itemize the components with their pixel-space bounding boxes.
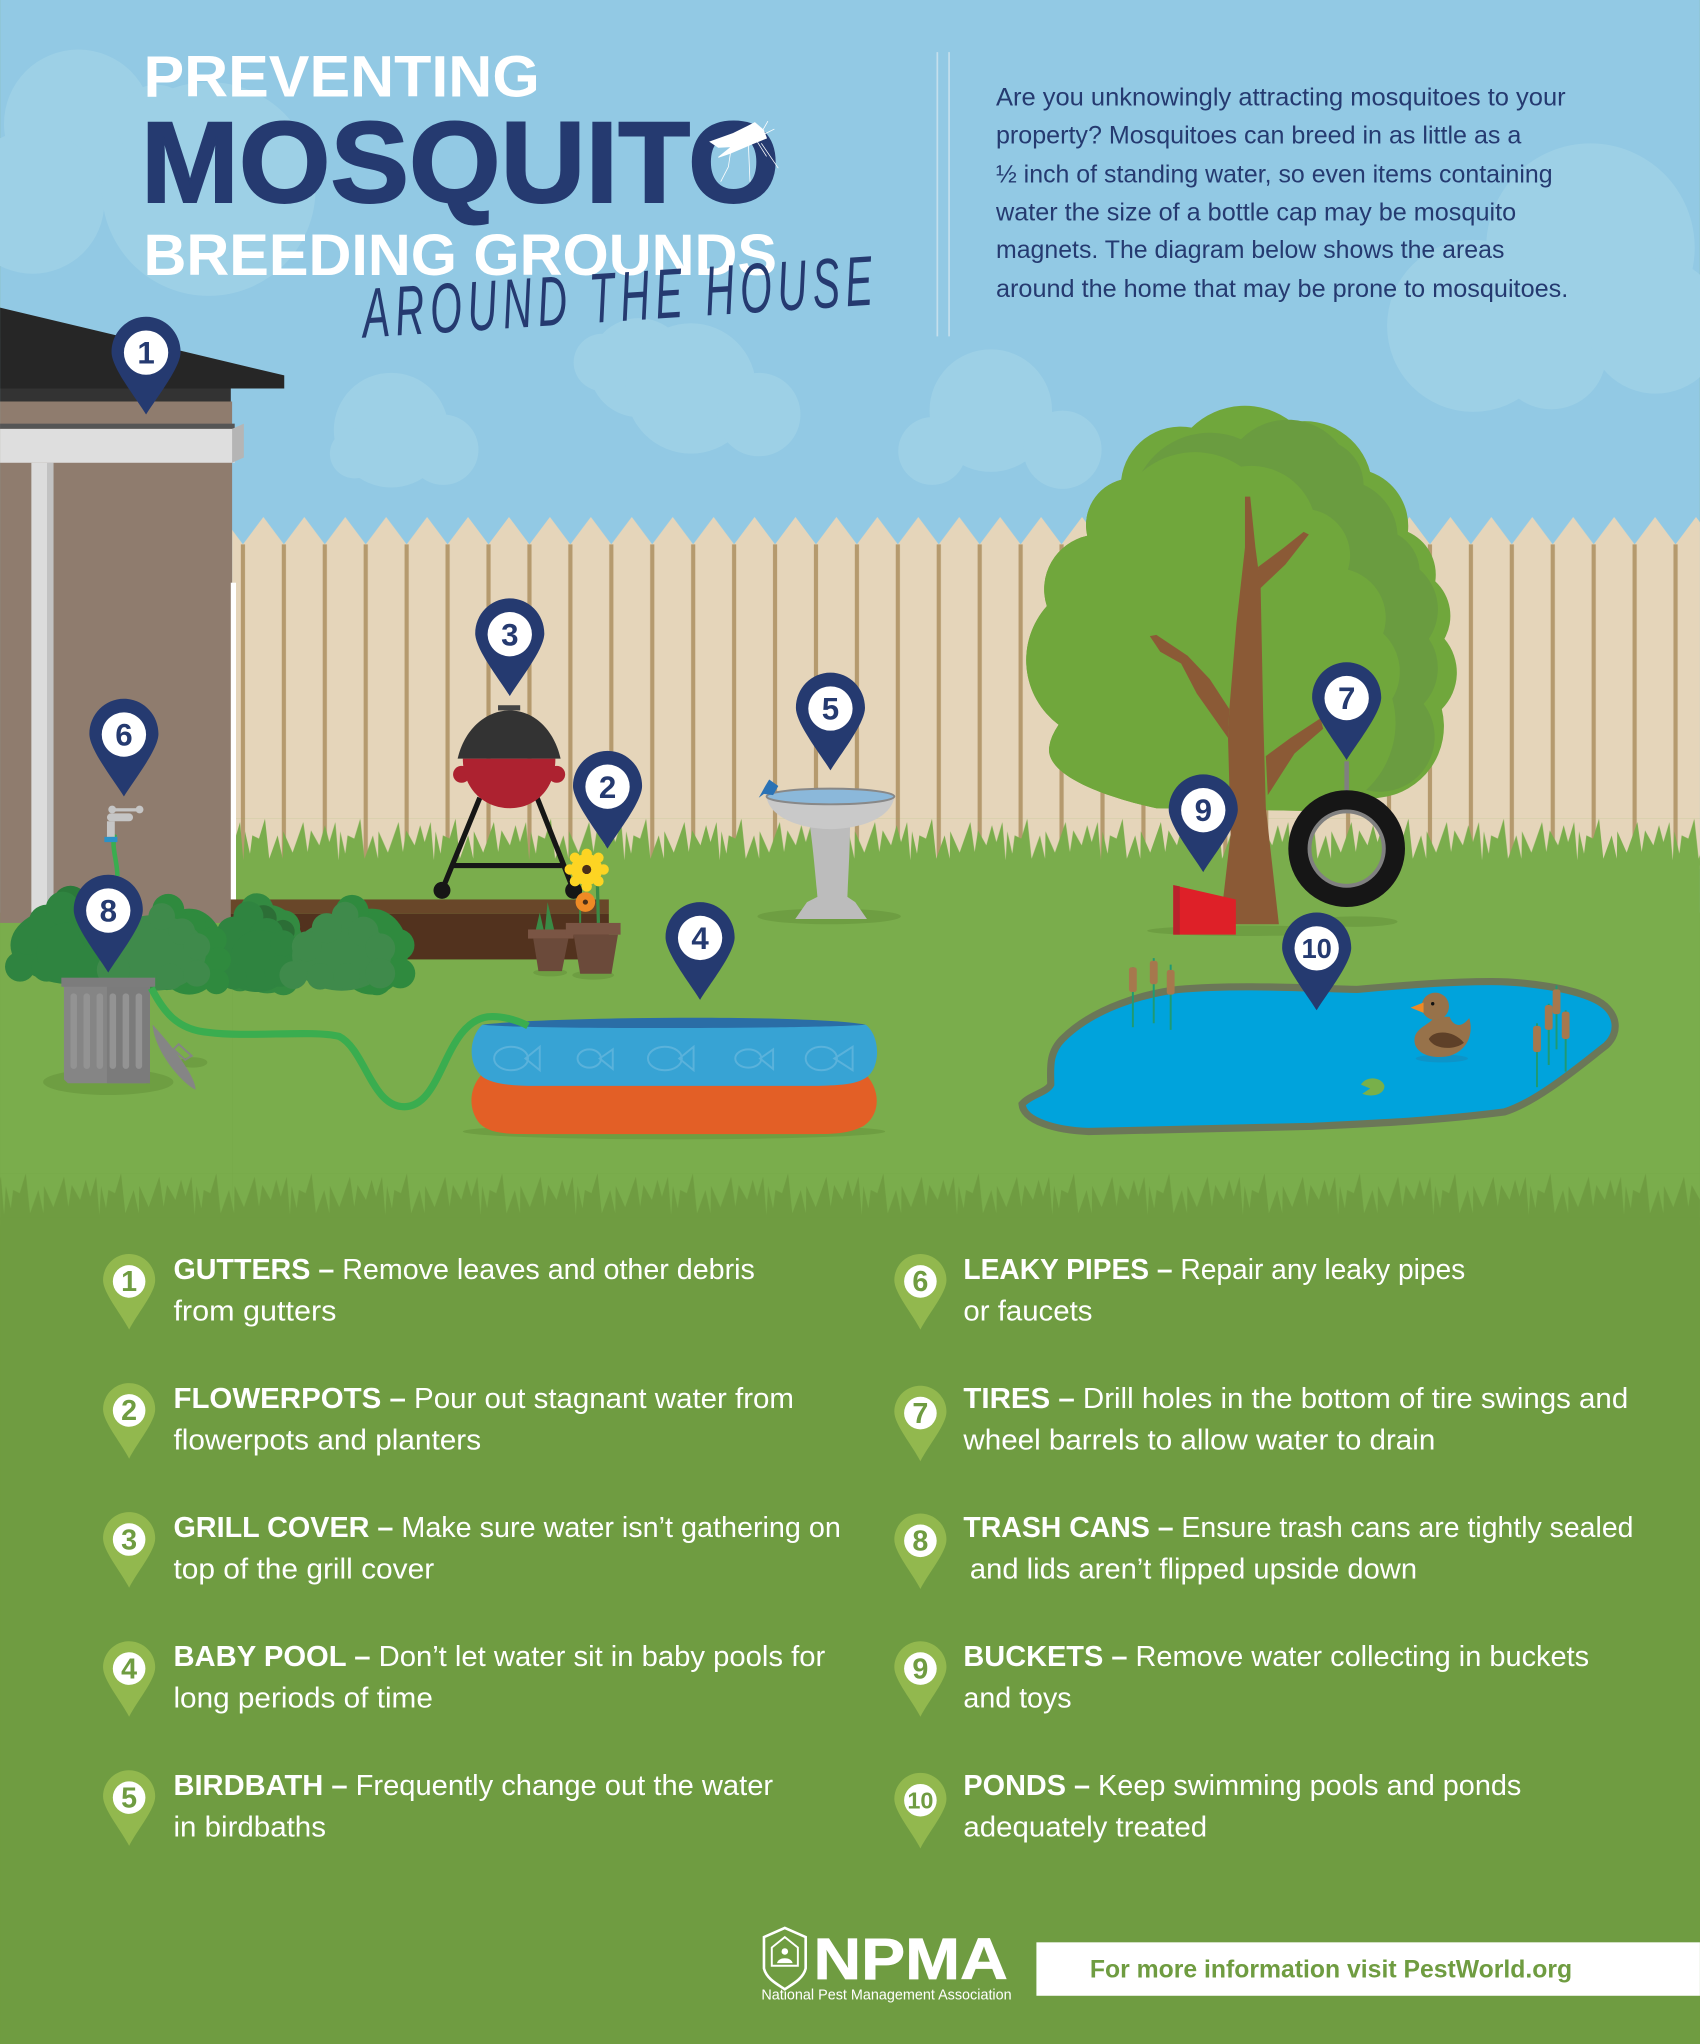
title xyxy=(141,44,875,354)
intro text block xyxy=(995,84,1568,303)
title: AROUND THE HOUSE xyxy=(358,242,875,354)
list item 8: trash cans xyxy=(894,1512,1633,1589)
list item 1: gutters: 1 xyxy=(121,1266,137,1298)
faucet xyxy=(104,806,143,876)
list item 4: baby pool xyxy=(103,1641,826,1717)
list item 3: grill cover xyxy=(103,1512,841,1588)
list item 6: leaky pipes: LEAKY PIPES – Repair any leaky pipes xyxy=(963,1254,1465,1286)
logo: NPMA: National Pest Management Association xyxy=(761,1987,1012,2004)
map pin 8: 8 xyxy=(100,894,117,929)
list item 1: gutters: GUTTERS – Remove leaves and other debris xyxy=(173,1254,755,1286)
map pin 10 xyxy=(1282,912,1351,1010)
call to action bar xyxy=(1036,1942,1700,1996)
trash can xyxy=(43,978,207,1095)
list item 9: buckets: 9 xyxy=(912,1653,928,1685)
raised bed xyxy=(231,899,609,959)
map pin 7 xyxy=(1312,662,1381,760)
birdbath xyxy=(757,780,901,924)
map pin 5 xyxy=(796,673,865,770)
list item 4: baby pool: long periods of time xyxy=(173,1683,433,1715)
flowerpots xyxy=(528,849,621,980)
list item 7: tires: 7 xyxy=(912,1398,928,1430)
tree canopy xyxy=(1026,406,1457,811)
list item 10: ponds: PONDS – Keep swimming pools and ponds xyxy=(963,1770,1521,1802)
map pin 3: 3 xyxy=(501,617,518,652)
list item 8: trash cans: TRASH CANS – Ensure trash cans are tightly sealed xyxy=(963,1512,1633,1544)
list item 4: baby pool: 4 xyxy=(121,1653,137,1685)
bush 4 xyxy=(279,895,415,995)
logo: NPMA xyxy=(761,1927,1012,2004)
list item 5: birdbath xyxy=(103,1770,774,1846)
list item 10: ponds: adequately treated xyxy=(963,1812,1207,1844)
house xyxy=(0,308,284,923)
list item 8: trash cans: 8 xyxy=(912,1526,928,1558)
divider xyxy=(937,52,949,336)
baby pool xyxy=(463,1018,885,1139)
title: PREVENTING xyxy=(143,44,540,109)
list item 6: leaky pipes: or faucets xyxy=(963,1296,1092,1328)
map pin 3 xyxy=(475,598,544,696)
intro text block: property? Mosquitoes can breed in as little as a xyxy=(996,121,1522,149)
list item 1: gutters xyxy=(103,1254,755,1330)
list item 2: flowerpots xyxy=(103,1383,794,1459)
list item 7: tires xyxy=(894,1383,1628,1461)
list item 5: birdbath: 5 xyxy=(121,1782,137,1814)
list item 2: flowerpots: FLOWERPOTS – Pour out stagnant water from xyxy=(173,1383,794,1415)
intro text block: around the home that may be prone to mosquitoes. xyxy=(996,275,1568,303)
list item 9: buckets xyxy=(894,1641,1589,1717)
bucket xyxy=(1147,885,1398,936)
list item 10: ponds: 10 xyxy=(907,1788,933,1814)
map pin 8 xyxy=(74,875,143,972)
list item 3: grill cover: GRILL COVER – Make sure water isn’t gathering on xyxy=(173,1512,841,1544)
list item 7: tires: wheel barrels to allow water to drain xyxy=(962,1425,1435,1457)
logo: NPMA: NPMA xyxy=(814,1927,1008,1992)
bushes xyxy=(5,886,415,995)
map pin 10: 10 xyxy=(1301,933,1332,964)
list item 9: buckets: BUCKETS – Remove water collecting in buckets xyxy=(963,1641,1589,1673)
bush 3 xyxy=(217,893,304,995)
title: MOSQUITO xyxy=(141,99,780,227)
grill xyxy=(434,705,582,899)
map pin 4 xyxy=(666,902,735,1000)
intro text block: magnets. The diagram below shows the areas xyxy=(996,236,1504,264)
list item 2: flowerpots: flowerpots and planters xyxy=(173,1425,481,1457)
icon: yellow flower xyxy=(565,849,609,892)
call to action bar: For more information visit PestWorld.org xyxy=(1090,1956,1572,1984)
map pin 2: 2 xyxy=(599,770,616,805)
cattails xyxy=(1129,958,1570,1087)
lower panel background xyxy=(0,1173,1700,2044)
title: BREEDING GROUNDS xyxy=(143,223,777,288)
list item 9: buckets: and toys xyxy=(963,1683,1072,1715)
tree trunk xyxy=(1150,497,1323,924)
list item 2: flowerpots: 2 xyxy=(121,1395,137,1427)
list item 7: tires: TIRES – Drill holes in the bottom of tire swings and xyxy=(963,1383,1628,1415)
map pin 6: 6 xyxy=(115,718,133,753)
icon: duck xyxy=(1411,993,1471,1062)
intro text block: Are you unknowingly attracting mosquitoes to your xyxy=(996,84,1566,112)
tire swing xyxy=(1298,761,1395,897)
list item 3: grill cover: 3 xyxy=(121,1524,137,1556)
back grass xyxy=(0,819,1700,1225)
intro text block: ½ inch of standing water, so even items containing xyxy=(996,160,1553,188)
map pin 9: 9 xyxy=(1195,793,1212,828)
garden hose xyxy=(151,988,528,1107)
list item 10: ponds xyxy=(894,1770,1521,1848)
pond xyxy=(1022,982,1615,1132)
list item 5: birdbath: in birdbaths xyxy=(173,1812,326,1844)
map pin 7: 7 xyxy=(1338,681,1355,716)
clouds xyxy=(0,50,1700,489)
map pin 4: 4 xyxy=(691,921,709,956)
fence xyxy=(232,517,1700,869)
map pin 1 xyxy=(112,317,181,415)
list item 6: leaky pipes: 6 xyxy=(912,1266,928,1298)
bush 1 xyxy=(5,886,133,984)
map pin 9 xyxy=(1169,774,1238,872)
bush 2 xyxy=(97,894,231,995)
map pin 6 xyxy=(89,699,158,796)
list item 8: trash cans: and lids aren’t flipped upside down xyxy=(970,1554,1417,1586)
list item 6: leaky pipes xyxy=(894,1254,1465,1330)
map pin 1: 1 xyxy=(137,336,155,371)
icon: bird xyxy=(759,780,778,798)
list item 1: gutters: from gutters xyxy=(173,1296,336,1328)
sky background xyxy=(0,0,1700,912)
list item 5: birdbath: BIRDBATH – Frequently change out the water xyxy=(173,1770,774,1802)
list item 3: grill cover: top of the grill cover xyxy=(173,1554,435,1586)
list item 4: baby pool: BABY POOL – Don’t let water sit in baby pools for xyxy=(173,1641,826,1673)
map pin 2 xyxy=(573,751,642,849)
icon: mosquito xyxy=(710,121,778,182)
icon: shield xyxy=(764,1928,806,1989)
map pin 5: 5 xyxy=(822,692,839,727)
intro text block: water the size of a bottle cap may be mosquito xyxy=(995,198,1516,226)
